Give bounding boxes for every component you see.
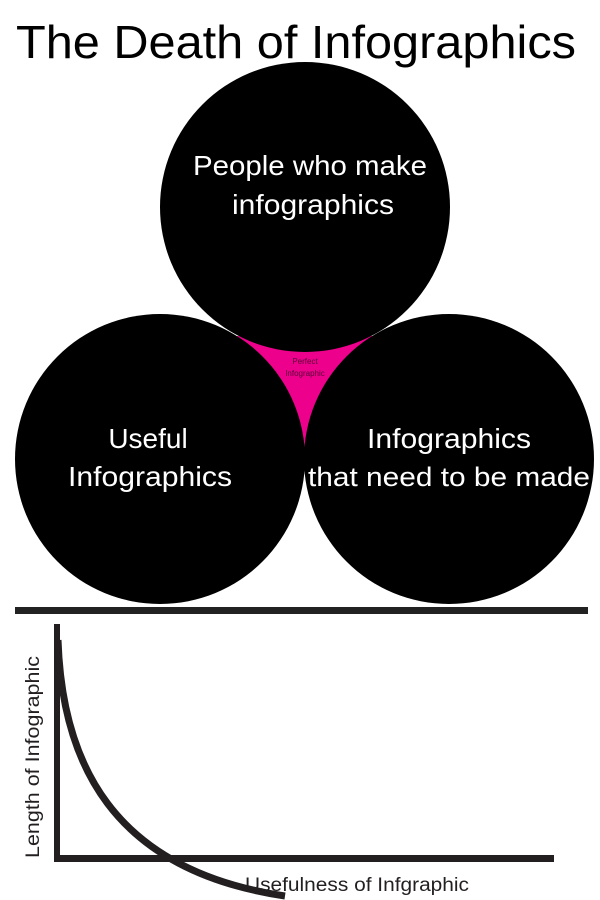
circle: people who make infographics: infographics — [232, 189, 394, 220]
x axis label: Usefulness of Infgraphic — [245, 875, 469, 896]
line chart — [23, 624, 554, 896]
pink intersection: perfect infographic — [236, 336, 374, 458]
label: perfect infographic — [285, 357, 325, 378]
circle: infographics that need to be made — [304, 314, 594, 604]
venn diagram — [15, 62, 594, 604]
curve — [58, 640, 285, 896]
y axis — [54, 624, 60, 862]
circle: useful infographics — [15, 314, 305, 604]
x axis — [54, 855, 554, 862]
label: perfect infographic: Infographic — [285, 369, 325, 378]
circle: useful infographics: Useful — [108, 423, 188, 454]
title: The Death of Infographics — [16, 16, 576, 68]
circle: people who make infographics — [160, 62, 450, 352]
circle: useful infographics: Infographics — [68, 461, 232, 492]
circle: infographics that need to be made: that need to be made — [308, 462, 590, 492]
circle: infographics that need to be made: Infographics — [367, 423, 531, 454]
y axis label: Length of Infographic — [23, 656, 44, 858]
circle: people who make infographics: People who make — [193, 150, 427, 181]
label: perfect infographic: Perfect — [292, 357, 318, 366]
